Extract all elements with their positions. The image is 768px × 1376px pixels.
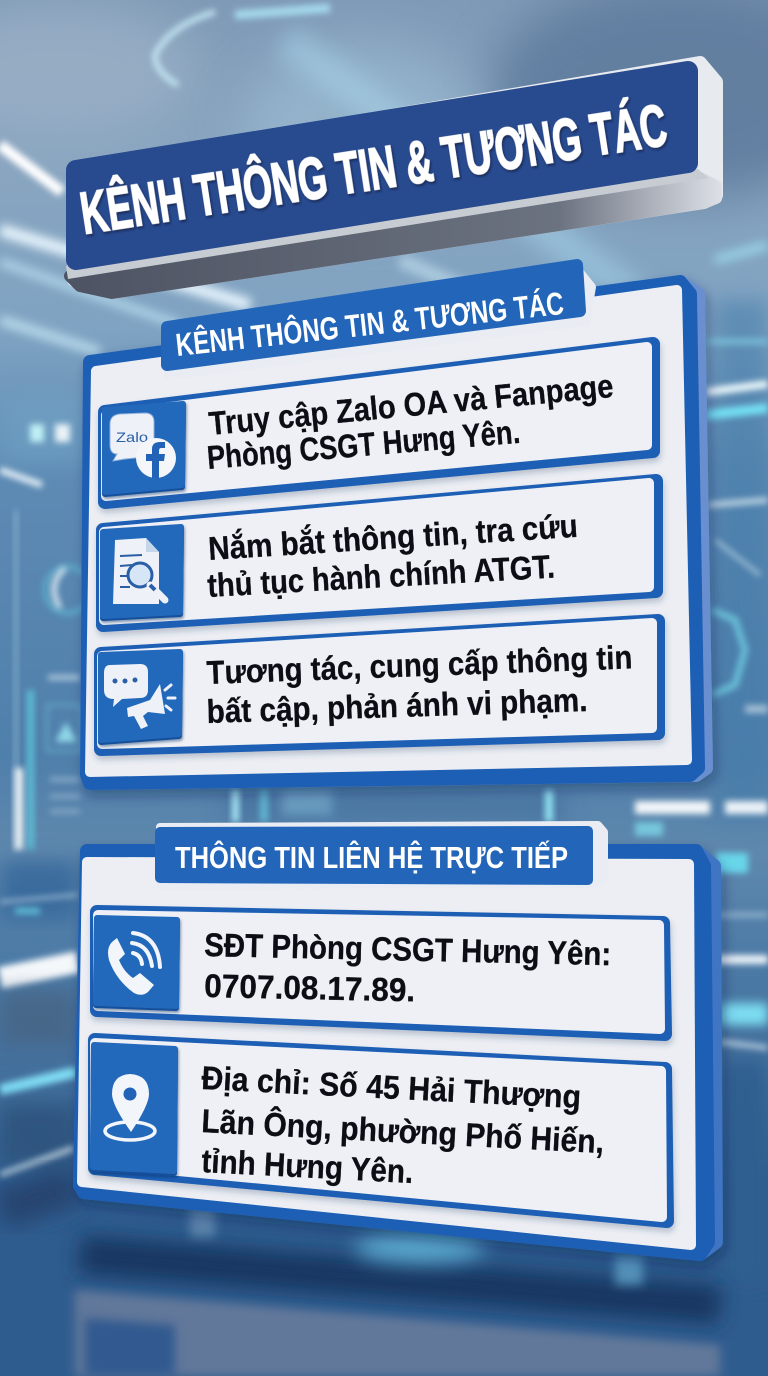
row text: Phòng CSGT Hưng Yên. — [205, 413, 521, 476]
row text — [201, 1059, 605, 1190]
panel 2 frame — [80, 851, 716, 1254]
row text — [205, 367, 615, 476]
icon: document search — [103, 527, 181, 618]
row text: Lãn Ông, phường Phố Hiến, — [201, 1101, 605, 1160]
row: tương tác phản ánh — [101, 621, 658, 749]
row text: Tương tác, cung cấp thông tin — [206, 638, 633, 691]
row text: tỉnh Hưng Yên. — [201, 1142, 414, 1190]
row: address — [93, 1040, 667, 1221]
row: tra cứu thủ tục — [103, 481, 656, 625]
icon: Zalo and Facebook: Zalo — [116, 429, 148, 445]
panel 1 frame — [87, 282, 706, 783]
row: phone — [96, 912, 665, 1034]
panel 2 header tab — [160, 825, 604, 885]
row text — [204, 926, 612, 1008]
row text: Truy cập Zalo OA và Fanpage — [207, 367, 615, 442]
icon: Zalo and Facebook — [105, 404, 183, 494]
panel: kênh thông tin và tương tác — [87, 265, 706, 783]
main title banner — [66, 63, 716, 293]
row text — [206, 507, 579, 604]
panel 2 header text: THÔNG TIN LIÊN HỆ TRỰC TIẾP — [175, 839, 568, 875]
row text: bất cập, phản ánh vi phạm. — [206, 681, 588, 730]
icon: location pin — [93, 1045, 175, 1173]
row text: thủ tục hành chính ATGT. — [206, 548, 556, 604]
row text — [206, 638, 633, 730]
row text: Địa chỉ: Số 45 Hải Thượng — [201, 1059, 582, 1115]
icon: phone — [96, 918, 177, 1008]
panel 1 header tab — [165, 265, 592, 376]
panel 1 header text: KÊNH THÔNG TIN & TƯƠNG TÁC — [174, 285, 565, 363]
row text: 0707.08.17.89. — [204, 967, 416, 1008]
icon: chat and megaphone — [101, 652, 180, 742]
row text: Nắm bắt thông tin, tra cứu — [207, 507, 579, 567]
panel: thông tin liên hệ trực tiếp — [80, 825, 716, 1254]
row text: SĐT Phòng CSGT Hưng Yên: — [204, 926, 612, 972]
row: Zalo and Fanpage — [105, 344, 653, 502]
